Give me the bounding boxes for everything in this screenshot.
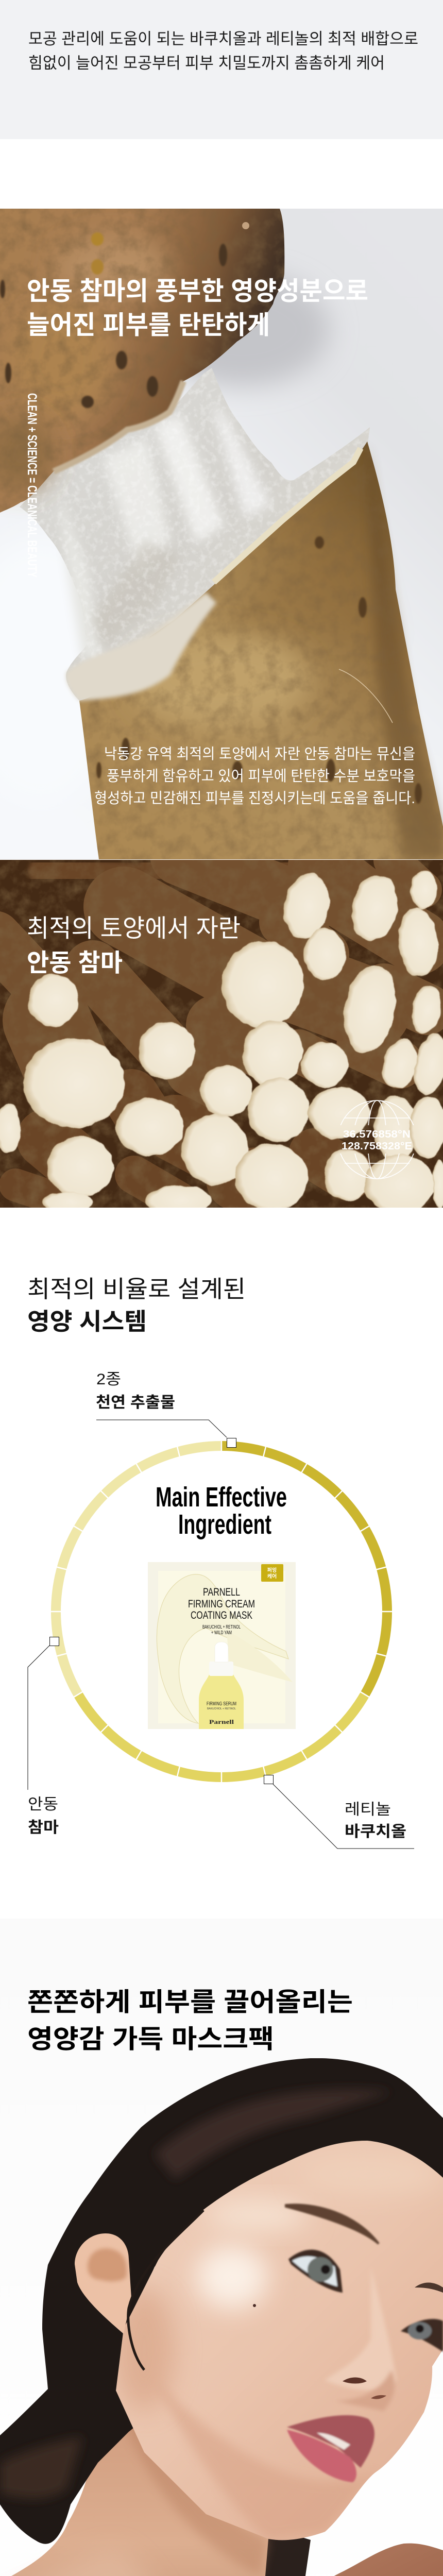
icon: globe with coordinates: 36.576858°N: [343, 1129, 411, 1140]
ring centre title: Main Effective: [156, 1482, 287, 1513]
cream swirl: [157, 1574, 288, 1723]
translucent mucus film: [20, 368, 370, 701]
body text on yam: 형성하고 민감해진 피부를 진정시키는데 도움을 줍니다.: [94, 790, 415, 807]
lower yam: [66, 442, 443, 859]
callout: wild yam: 안동: [28, 1796, 58, 1813]
headline on yam: 늘어진 피부를 탄탄하게: [27, 311, 270, 340]
ring centre title: [156, 1482, 287, 1540]
lips: [287, 2415, 374, 2482]
ear: [75, 2233, 131, 2334]
callout: natural extracts: [96, 1371, 236, 1448]
pouch text: PARNELL: [203, 1586, 240, 1598]
body text on yam: 풍부하게 함유하고 있어 피부에 탄탄한 수분 보호막을: [107, 768, 415, 785]
neck and chest: [0, 2401, 268, 2576]
callout: natural extracts: 2종: [96, 1371, 121, 1388]
donut ring 24 segments: [48, 1438, 395, 1785]
callout: retinol bakuchiol: 바쿠치올: [345, 1823, 406, 1840]
icon: beauty mark: [253, 2304, 256, 2307]
callout: natural extracts: 천연 추출물: [96, 1394, 175, 1411]
foam: [66, 592, 216, 701]
cut faces: [0, 869, 443, 1215]
face: [103, 2128, 443, 2550]
heading: 영양감 가득 마스크팩: [27, 2025, 274, 2054]
bottle: FIRMING SERUM: [207, 1701, 236, 1707]
pouch text: COATING MASK: [191, 1609, 252, 1621]
headline on yam: 안동 참마의 풍부한 영양성분으로: [27, 277, 368, 306]
panel: sliced yam logs photo: [0, 855, 443, 1215]
eye left: [288, 2250, 343, 2293]
panel: nutrition system: [27, 1276, 414, 1849]
heading: 최적의 비율로 설계된: [27, 1276, 246, 1302]
intro text: [28, 30, 418, 72]
body text on yam: 낙동강 유역 최적의 토양에서 자란 안동 참마는 뮤신을: [104, 746, 415, 762]
intro text: 모공 관리에 도움이 되는 바쿠치올과 레티놀의 최적 배합으로: [28, 30, 418, 48]
pouch text: + WILD YAM: [211, 1630, 232, 1636]
pouch text: [188, 1586, 255, 1636]
heading: [27, 1276, 246, 1335]
bottle: BAKUCHIOL + RETINOL: [207, 1707, 236, 1710]
heading: 쫀쫀하게 피부를 끌어올리는: [27, 1988, 353, 2016]
cut edge: [214, 448, 361, 582]
heading on logs: 최적의 토양에서 자란: [27, 915, 241, 942]
vertical tagline: CLEAN + SCIENCE = CLEANICAL BEAUTY: [25, 393, 39, 578]
badge: 케어: [267, 1573, 277, 1580]
headline on yam: [27, 277, 368, 340]
callout: wild yam: [28, 1637, 59, 1836]
badge: 퍼밍: [267, 1567, 277, 1573]
icon: globe with coordinates: 128.758328°E: [342, 1141, 412, 1152]
callout: retinol bakuchiol: 레티놀: [345, 1801, 391, 1818]
upper yam skin: [0, 209, 284, 513]
heading: [27, 1988, 353, 2054]
shoulder: [258, 2544, 443, 2576]
brow: [286, 2205, 379, 2244]
panel: model portrait: [0, 1919, 443, 2576]
intro text: 힘없이 늘어진 모공부터 피부 치밀도까지 촘촘하게 케어: [28, 54, 385, 72]
hair: [0, 2058, 443, 2544]
logs: [0, 855, 427, 1202]
panel: peeled wild yam photo: [0, 209, 443, 859]
side hair strand: [128, 2210, 203, 2370]
nose shading: [325, 2267, 397, 2390]
eye right: [401, 2319, 443, 2352]
heading on logs: 안동 참마: [27, 950, 123, 977]
callout: wild yam: 참마: [28, 1819, 59, 1836]
pouch text: BAKUCHIOL + RETINOL: [202, 1624, 241, 1630]
heading: 영양 시스템: [27, 1308, 147, 1335]
callout: retinol bakuchiol: [264, 1775, 414, 1849]
product: mask pouch: [148, 1562, 296, 1729]
body text on yam: [94, 746, 415, 807]
bottle: Parnell: [209, 1718, 234, 1725]
badge: [261, 1564, 283, 1582]
heading on logs: [27, 915, 241, 977]
ring centre title: Ingredient: [178, 1509, 271, 1540]
panel: intro: [0, 0, 443, 139]
hair behind neck: [257, 2524, 311, 2576]
nostrils: [343, 2377, 367, 2383]
pouch text: FIRMING CREAM: [188, 1598, 255, 1610]
icon: globe with coordinates: [338, 1100, 416, 1179]
bottle: [199, 1642, 244, 1729]
portrait: [0, 2058, 443, 2576]
